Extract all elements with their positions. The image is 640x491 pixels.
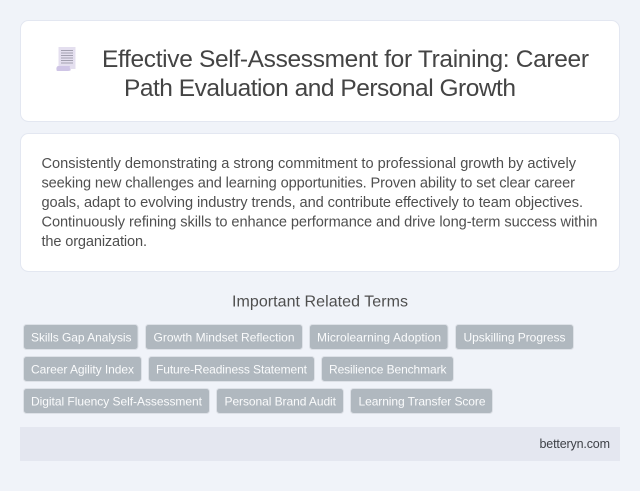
panel: title card (20, 20, 620, 122)
icon: document scroll (56, 47, 76, 71)
tag: Future-Readiness Statement (148, 356, 314, 382)
tag: Learning Transfer Score (350, 388, 492, 414)
tag: Personal Brand Audit (216, 388, 344, 414)
footer source text: betteryn.com (540, 437, 610, 451)
panel: summary text: Consistently demonstrating a strong commitment to professional growth by actively (42, 156, 577, 172)
tag: Growth Mindset Reflection (146, 324, 302, 350)
tag: Microlearning Adoption (310, 324, 448, 350)
tag: Upskilling Progress: Upskilling Progress (464, 330, 566, 344)
panel: summary text (20, 134, 620, 272)
panel: summary text: Continuously refining skills to enhance performance and drive long-term success within (42, 214, 598, 230)
tag: Career Agility Index (24, 356, 142, 382)
tag: Skills Gap Analysis: Skills Gap Analysis (31, 330, 132, 344)
tag: Learning Transfer Score: Learning Transfer Score (358, 394, 486, 408)
footer bar (20, 427, 620, 461)
tag: Skills Gap Analysis (24, 324, 138, 350)
panel: summary text: seeking new challenges and learning opportunities. Proven ability to set clear career (42, 176, 575, 192)
tag: Digital Fluency Self-Assessment: Digital Fluency Self-Assessment (31, 394, 203, 408)
tag: Personal Brand Audit: Personal Brand Audit (224, 394, 337, 408)
tag: Growth Mindset Reflection: Growth Mindset Reflection (154, 330, 294, 344)
title: Path Evaluation and Personal Growth (124, 75, 516, 102)
title (102, 46, 589, 102)
heading: important related terms: Important Related Terms (232, 294, 408, 310)
tag: Future-Readiness Statement: Future-Readiness Statement (156, 362, 308, 376)
tag: Resilience Benchmark (322, 356, 454, 382)
panel: summary text: goals, adapt to evolving industry trends, and contribute effectively to team objectives. (42, 195, 583, 211)
panel: summary text: the organization. (42, 234, 147, 250)
tag: Digital Fluency Self-Assessment (24, 388, 210, 414)
tag: Career Agility Index: Career Agility Index (31, 362, 134, 376)
tag: Microlearning Adoption: Microlearning Adoption (317, 330, 441, 344)
tag: Upskilling Progress (456, 324, 574, 350)
title: Effective Self-Assessment for Training: Career (102, 46, 589, 73)
tag: Resilience Benchmark: Resilience Benchmark (329, 362, 448, 376)
